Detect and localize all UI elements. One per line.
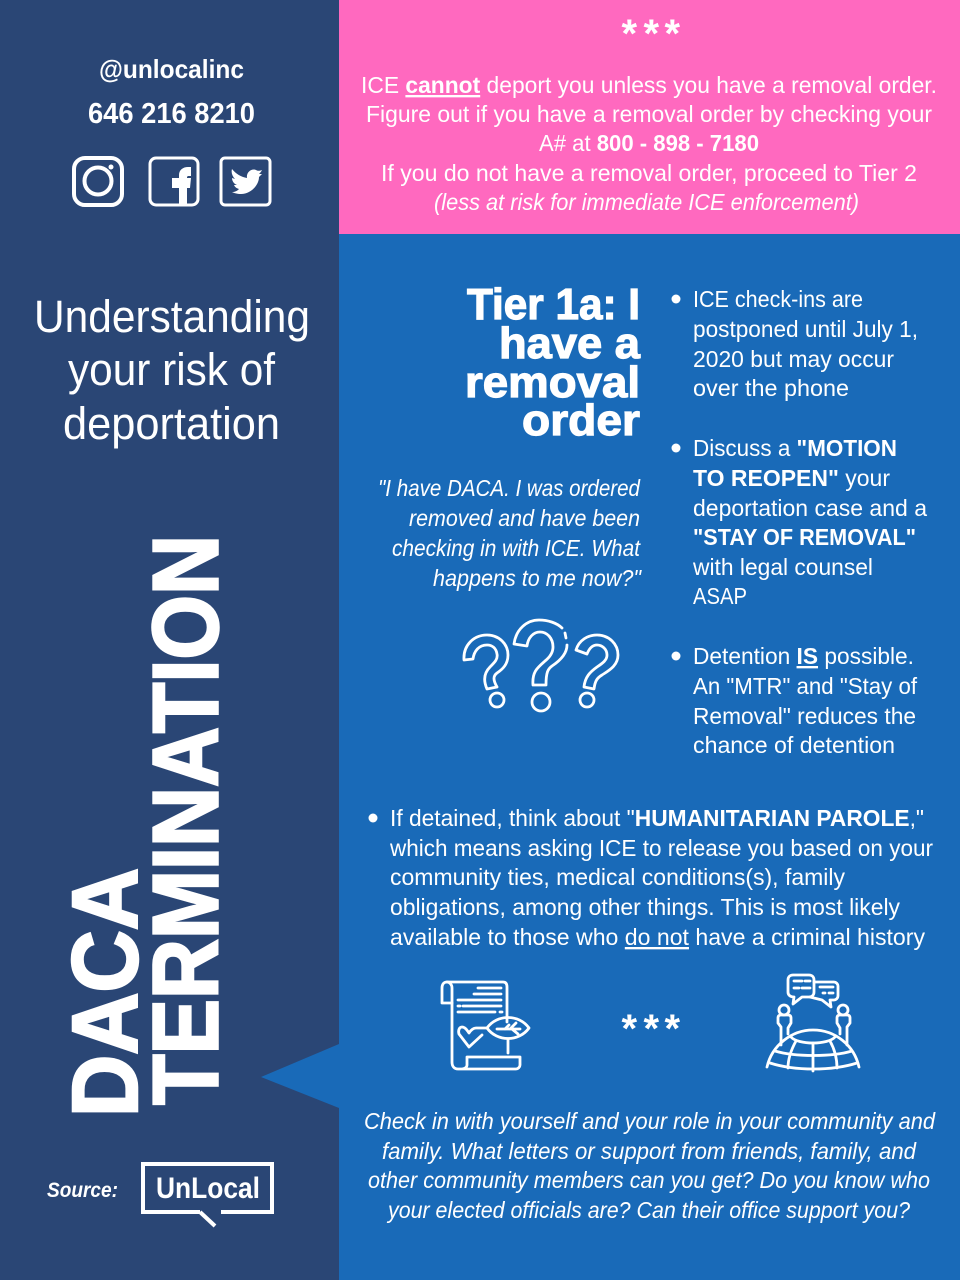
quote: "I have DACA. I was ordered — [378, 475, 641, 501]
bullet: motion to reopen: deportation case and a — [693, 495, 928, 521]
notice text: (less at risk for immediate ICE enforcement) — [434, 189, 859, 215]
bullet: humanitarian parole: available to those who do not have a criminal history — [390, 924, 925, 950]
quote — [378, 475, 643, 591]
icon: instagram — [74, 158, 122, 205]
bullet: humanitarian parole — [368, 805, 933, 950]
notice text: A# at 800 - 898 - 7180 — [539, 130, 759, 156]
heading: Tier 1a — [465, 280, 641, 445]
rotated title: TERMINATION — [134, 535, 238, 1105]
panel: left navy sidebar — [0, 0, 339, 1280]
heading: Tier 1a: order — [522, 396, 640, 445]
contact handle and phone: @unlocalinc — [99, 54, 244, 84]
bullet: motion to reopen: TO REOPEN" your — [693, 465, 890, 491]
contact handle and phone: 646 216 8210 — [88, 98, 255, 130]
bullet: motion to reopen: ASAP — [693, 583, 747, 609]
contact handle and phone — [88, 54, 255, 130]
quote: removed and have been — [409, 505, 640, 531]
decorative stars: *** — [622, 12, 680, 56]
panel: main blue background — [339, 234, 960, 1280]
subtitle — [34, 291, 310, 449]
decorative stars: *** — [622, 1007, 680, 1051]
quote: checking in with ICE. What — [392, 535, 641, 561]
subtitle: your risk of — [68, 344, 275, 395]
heading: Tier 1a: Tier 1a: I — [467, 280, 640, 329]
bullet: detention: chance of detention — [693, 732, 895, 758]
closing reflection text: family. What letters or support from friends, family, and — [382, 1138, 917, 1164]
bullet: check-ins — [672, 286, 918, 401]
logo: UnLocal — [143, 1164, 272, 1226]
bullet: detention: Detention IS possible. — [693, 643, 914, 669]
bullet: motion to reopen — [672, 435, 928, 609]
icon: twitter — [221, 158, 270, 205]
quote: happens to me now?" — [433, 565, 643, 591]
heading: Tier 1a: have a — [499, 319, 641, 368]
notice text: ICE cannot deport you unless you have a removal order. — [361, 72, 937, 98]
icon: letter with heart and leaf — [442, 982, 529, 1069]
bullet: check-ins: postponed until July 1, — [693, 316, 918, 342]
rotated title — [53, 535, 238, 1117]
source label: Source: — [47, 1179, 118, 1202]
pointer arrow — [261, 1044, 339, 1108]
bullet: humanitarian parole: If detained, think about "HUMANITARIAN PAROLE," — [390, 805, 924, 831]
bullet: humanitarian parole: which means asking ICE to release you based on your — [389, 835, 933, 861]
notice text — [361, 72, 937, 215]
bullet: detention: An "MTR" and "Stay of — [693, 673, 917, 699]
logo: UnLocal: UnLocal — [156, 1172, 260, 1205]
bullet: check-ins: ICE check-ins are — [693, 286, 863, 312]
icon: community globe with speech bubbles — [767, 975, 859, 1071]
bullet: humanitarian parole: obligations, among other things. This is most likely — [390, 894, 900, 920]
notice text: Figure out if you have a removal order by checking your — [366, 101, 932, 127]
bullet list: tier 1a — [672, 286, 928, 758]
bullet: detention: Removal" reduces the — [693, 703, 916, 729]
icon: facebook — [150, 158, 198, 205]
bullet: motion to reopen: with legal counsel — [692, 554, 873, 580]
rotated title: DACA — [53, 868, 157, 1117]
bullet: humanitarian parole: community ties, medical conditions(s), family — [390, 864, 845, 890]
bullet: detention — [672, 643, 917, 758]
panel: pink notice — [339, 0, 960, 234]
closing reflection text — [364, 1108, 936, 1223]
bullet: check-ins: over the phone — [693, 375, 849, 401]
bullet: check-ins: 2020 but may occur — [693, 346, 894, 372]
subtitle: Understanding — [34, 291, 310, 342]
subtitle: deportation — [63, 398, 280, 449]
bullet: motion to reopen: Discuss a "MOTION — [693, 435, 897, 461]
bullet: motion to reopen: "STAY OF REMOVAL" — [693, 524, 916, 550]
icon: question marks — [464, 620, 618, 711]
notice text: If you do not have a removal order, proceed to Tier 2 — [381, 160, 917, 186]
heading: Tier 1a: removal — [465, 358, 640, 407]
closing reflection text: your elected officials are? Can their office support you? — [386, 1197, 910, 1223]
